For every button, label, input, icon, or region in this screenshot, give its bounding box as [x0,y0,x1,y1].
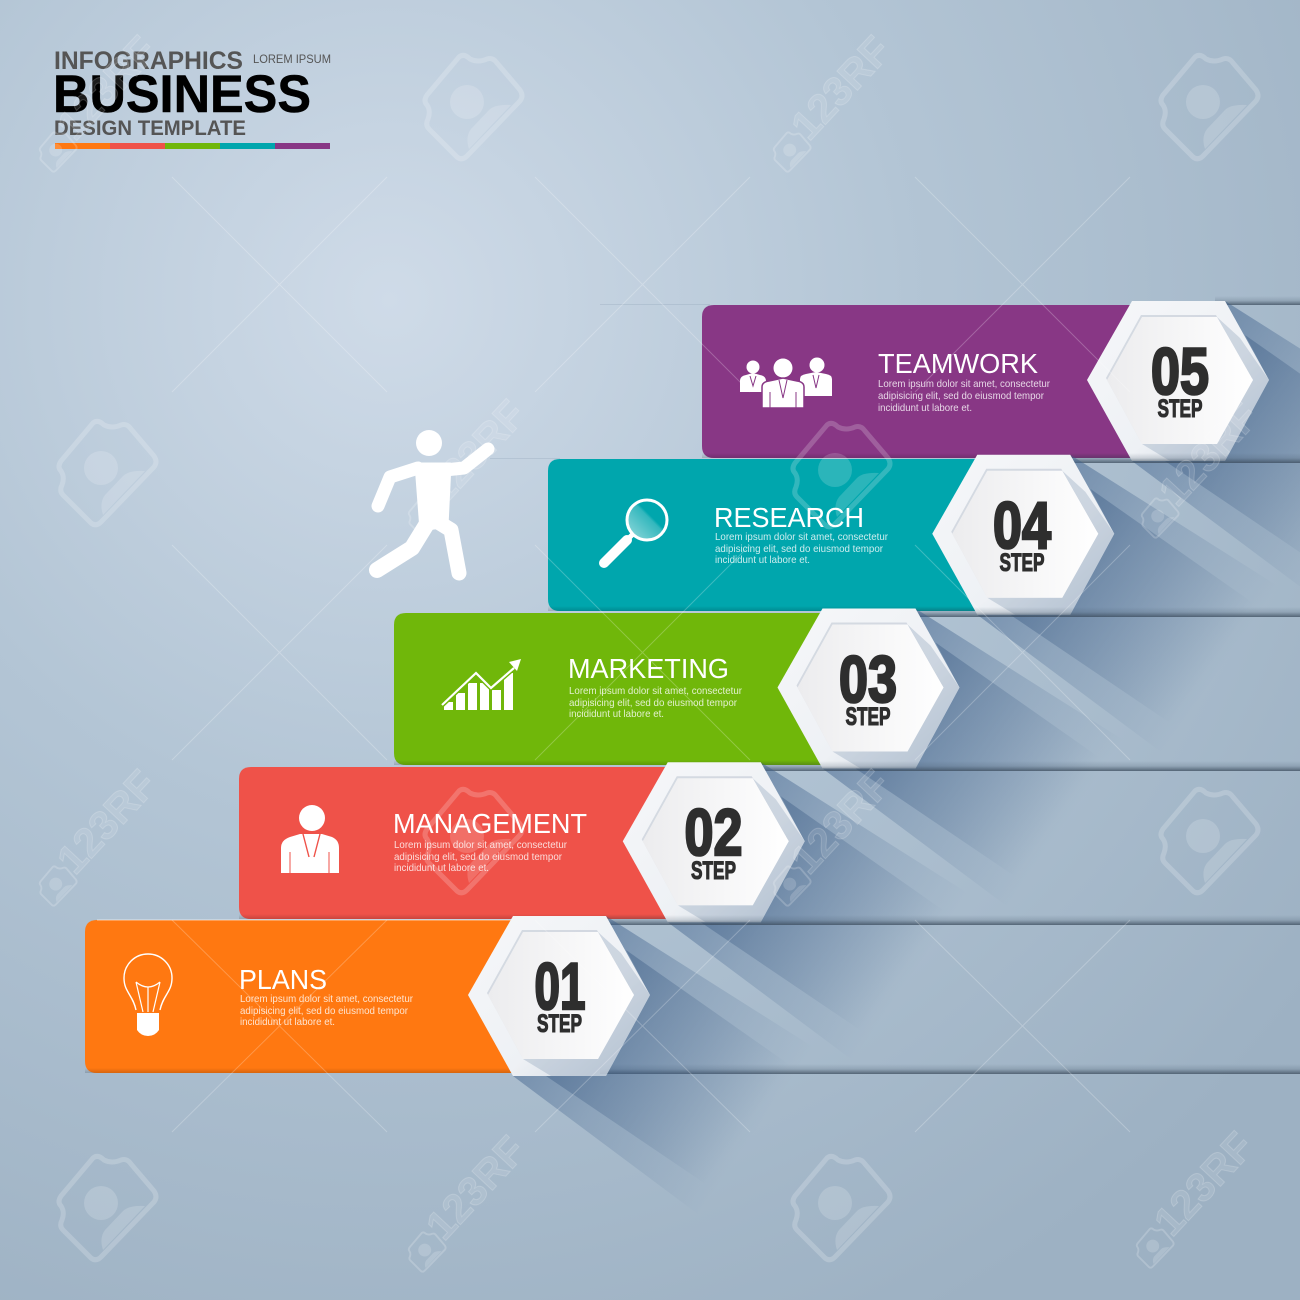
hexagon 2: 02 [684,795,742,869]
title line 1: INFOGRAPHICS [54,47,243,75]
icon: running figure [377,430,488,573]
hexagon 1: 01 [534,949,586,1023]
title block [53,47,331,149]
body text 4: incididunt ut labore et. [715,554,810,566]
small label: LOREM IPSUM [253,52,331,66]
hexagon 2: STEP [691,857,736,885]
heading: management: MANAGEMENT [393,808,587,839]
hexagon 3: 03 [839,642,897,716]
hexagon long shadow 5 [1132,301,1300,650]
step 1 strip line [600,915,1300,1074]
body text 3: incididunt ut labore et. [569,708,664,720]
heading: research: RESEARCH [714,502,864,533]
hexagon 1: STEP [537,1010,582,1038]
watermark overlay: 123RF [417,1127,534,1249]
hexagon 1 [468,916,650,1076]
hexagon 2 [623,762,805,922]
watermark overlay: 123RF [48,27,165,149]
hexagon long shadow 4 [977,455,1300,804]
hexagon 3: STEP [846,703,890,731]
watermark overlay: 123RF [417,391,534,513]
icon: growth chart [442,659,521,710]
band 5 [702,305,1140,458]
step 5 strip line [600,296,1300,305]
step 2 strip line [750,761,1300,771]
step 3 strip line [905,607,1300,617]
watermark overlay: 123RF [782,761,899,883]
band 1 [85,920,520,1073]
watermark overlay: 123RF [48,761,165,883]
hexagon long shadow 3 [822,608,1190,958]
icon: manager [281,805,339,873]
icon: magnifier [604,500,667,563]
step 1: plans [85,916,881,1265]
body text 1 [240,993,413,1028]
band 3 [394,613,830,765]
body text 5: adipisicing elit, sed do eiusmod tempor [878,390,1044,402]
body text 3 [569,685,742,720]
body text 5 [878,378,1050,414]
body text 5: Lorem ipsum dolor sit amet, consectetur [878,378,1050,390]
heading: plans: PLANS [239,964,327,995]
body text 1: adipisicing elit, sed do eiusmod tempor [240,1005,408,1017]
body text 4: Lorem ipsum dolor sit amet, consectetur [715,531,888,543]
body text 3: adipisicing elit, sed do eiusmod tempor [569,697,737,709]
body text 4 [715,531,888,566]
step 5: teamwork [702,301,1300,650]
hexagon 5 [1087,301,1269,461]
icon: light bulb [124,954,172,1036]
hexagon long shadow 2 [668,762,1036,1111]
body text 3: Lorem ipsum dolor sit amet, consectetur [569,685,742,697]
step 2: management [239,762,1036,1111]
body text 2: incididunt ut labore et. [394,862,489,874]
hexagon 3 [778,608,960,768]
band 4 [548,459,985,611]
body text 2 [394,839,567,874]
hexagon 4 [932,455,1114,615]
body text 4: adipisicing elit, sed do eiusmod tempor [715,543,883,555]
body text 2: adipisicing elit, sed do eiusmod tempor [394,851,562,863]
title line 2: BUSINESS [53,65,311,124]
heading: teamwork: TEAMWORK [878,348,1038,379]
hexagon 4: STEP [1000,549,1044,577]
hexagon 4: 04 [993,488,1051,562]
body text 5: incididunt ut labore et. [878,402,972,414]
heading: marketing: MARKETING [568,653,729,684]
step 4: research [548,455,1300,804]
step 4 strip line [490,453,1300,463]
body text 1: Lorem ipsum dolor sit amet, consectetur [240,993,413,1005]
watermark overlay: 123RF [1145,1123,1262,1245]
hexagon 5: 05 [1151,334,1209,408]
body text 1: incididunt ut labore et. [240,1016,335,1028]
hexagon long shadow 1 [513,916,881,1265]
step 3: marketing [394,608,1190,958]
title line 3: DESIGN TEMPLATE [54,117,246,140]
icon: team [740,358,832,408]
band 2 [239,767,675,919]
body text 2: Lorem ipsum dolor sit amet, consectetur [394,839,567,851]
watermark overlay: 123RF [1150,393,1267,515]
hexagon 5: STEP [1158,395,1202,423]
colour bar [55,143,330,149]
watermark overlay: 123RF [782,27,899,149]
